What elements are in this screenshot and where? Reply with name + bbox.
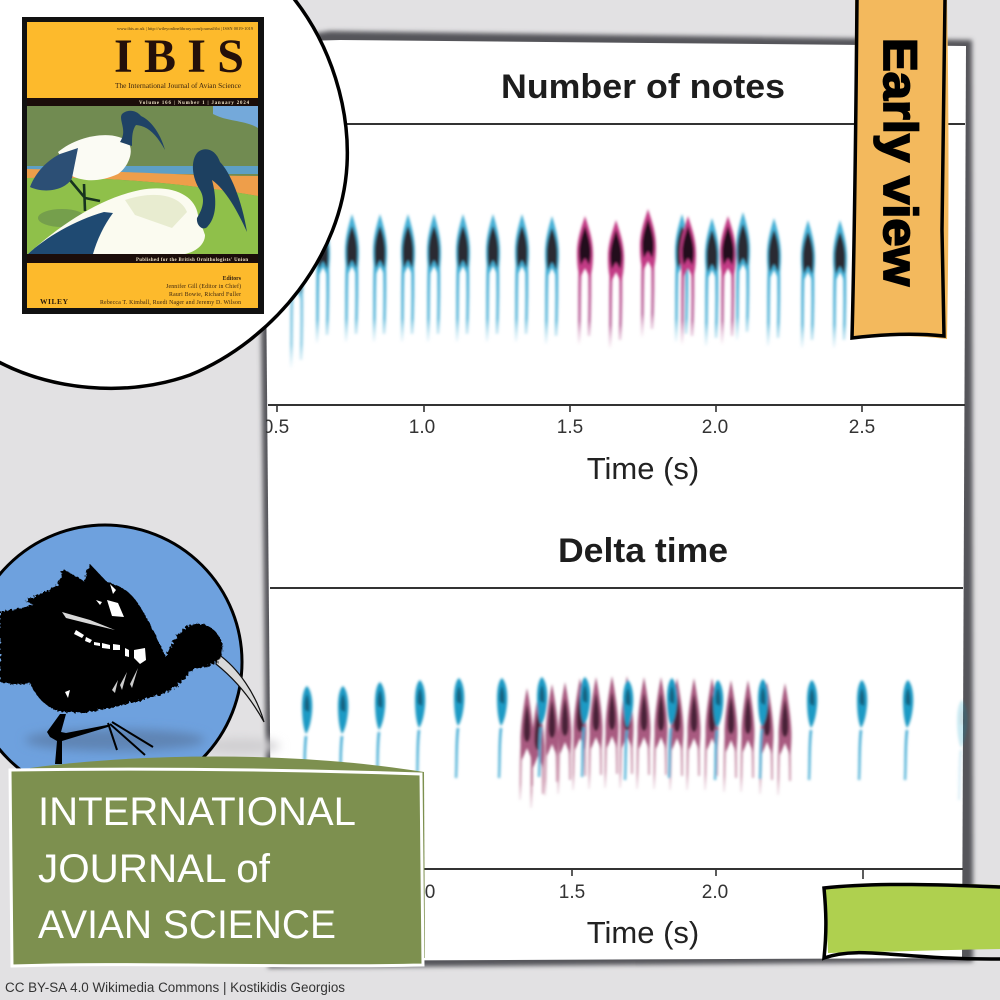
- photo circle: blue: [0, 525, 242, 799]
- cover editors: Rebecca T. Kimball, Ruedi Nager and Jeremy D. Wilson: [100, 300, 241, 306]
- label: journal name: JOURNAL of: [38, 847, 271, 891]
- x axis: delta time: 2.0: [702, 882, 728, 903]
- spectrogram: number of notes: [290, 209, 847, 368]
- bird shadow on background: [200, 739, 280, 753]
- chart rule lower: [270, 587, 963, 589]
- cover masthead: IBIS: [114, 30, 244, 83]
- plumage highlights: [62, 584, 146, 698]
- chart title: number of notes: Number of notes: [501, 68, 785, 106]
- cover editors: Jennifer Gill (Editor in Chief): [166, 283, 241, 290]
- x axis: number of notes: 2.0: [702, 417, 728, 438]
- x axis: delta time: Time (s): [587, 915, 699, 950]
- callout: journal circle: [0, 0, 347, 388]
- cover publisher logo: WILEY: [40, 297, 69, 306]
- cover subtitle: The International Journal of Avian Science: [115, 81, 242, 90]
- x axis: delta time: 0: [425, 882, 435, 903]
- x axis: delta time: 1.5: [559, 882, 585, 903]
- x axis: number of notes: 0.5: [263, 417, 289, 438]
- spectrogram: delta time: [302, 676, 967, 808]
- x axis: number of notes: 1.5: [557, 417, 583, 438]
- label text: INTERNATIONAL: [38, 790, 356, 834]
- cover illustration: [27, 106, 258, 254]
- label: journal name: AVIAN SCIENCE: [38, 903, 336, 947]
- cover editors: Rauri Bowie, Richard Fuller: [169, 292, 241, 298]
- chart rule top: [268, 123, 965, 125]
- cover url line: www.ibis.ac.uk | http://wileyonlinelibrary.com/journal/ibi | ISSN 0019-1019: [117, 26, 254, 31]
- tag label: Early view: [874, 38, 927, 286]
- chart title: delta time: Delta time: [558, 532, 728, 570]
- tag: early view: [852, 0, 948, 339]
- icon: glossy ibis: [0, 564, 264, 764]
- label: journal name: [10, 756, 425, 966]
- x axis: number of notes: 1.0: [409, 417, 435, 438]
- large ibis: [28, 149, 247, 254]
- x axis: number of notes: [263, 404, 965, 486]
- bird ground shadow: [25, 729, 205, 751]
- cover band bottom: [27, 254, 258, 263]
- small ibis: [30, 111, 165, 211]
- x axis: number of notes: Time (s): [587, 451, 699, 486]
- cover band top: [27, 98, 258, 106]
- paper sheet: figure: [258, 31, 973, 968]
- cover publisher line: Published for the British Ornithologists' Union: [136, 258, 248, 263]
- credit line: CC BY-SA 4.0 Wikimedia Commons | Kostikidis Georgios: [5, 980, 345, 995]
- cover editors: Editors: [223, 276, 242, 282]
- x axis: number of notes: 2.5: [849, 417, 875, 438]
- journal cover: IBIS: [22, 17, 264, 314]
- x axis: delta time: [270, 868, 963, 950]
- cover editors: [100, 276, 242, 306]
- banner: blank green: [824, 883, 1000, 959]
- cover issue line: Volume 166 | Number 1 | January 2024: [139, 101, 250, 106]
